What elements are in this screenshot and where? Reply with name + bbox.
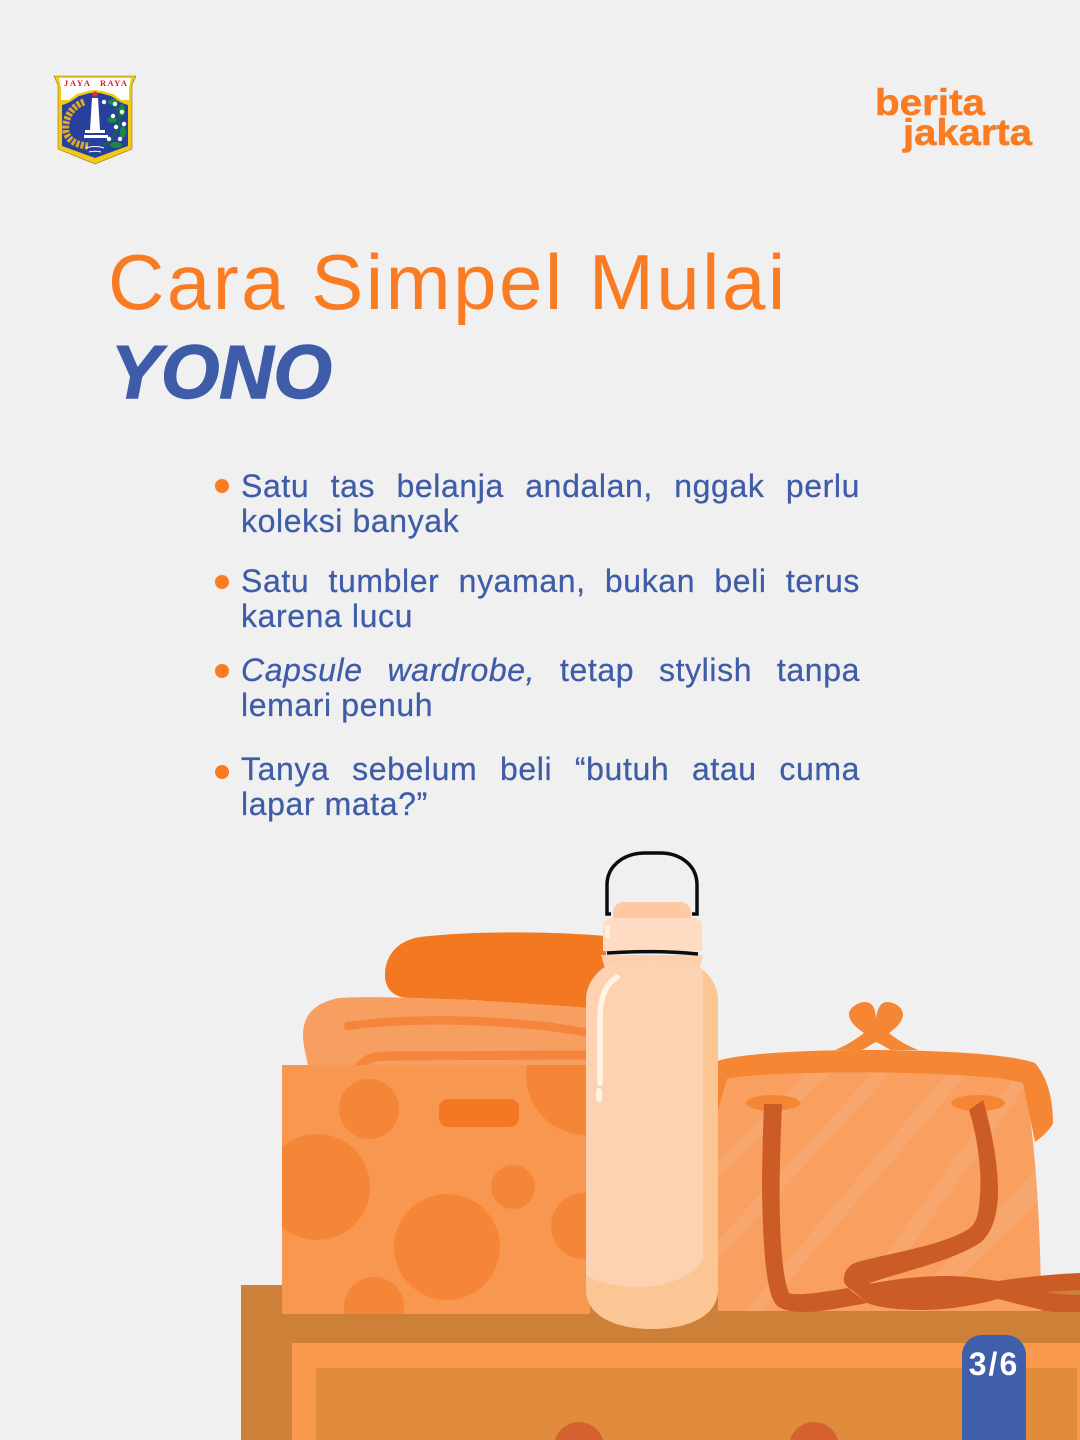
logo: Jakarta emblem: JAYA: [64, 78, 91, 88]
water bottle: [586, 853, 718, 1329]
bullet 3: Capsule wardrobe, tetap stylish tanpa: [241, 652, 860, 688]
bullet 2: Satu tumbler nyaman, bukan beli terus: [241, 563, 860, 599]
bullet 1: [215, 468, 860, 539]
illustration: table, box, towels, bottle and bag: [241, 851, 1080, 1440]
bullet 1: koleksi banyak: [241, 503, 459, 539]
bullet list: [215, 468, 860, 822]
logo: Jakarta emblem: RAYA: [100, 78, 128, 88]
bullet 2: karena lucu: [241, 598, 413, 634]
title line: YONO: YONO: [111, 330, 332, 414]
bullet 3: lemari penuh: [241, 687, 433, 723]
light orange towel: [303, 997, 590, 1068]
logo: berita jakarta: berita: [875, 82, 985, 123]
page badge 3/6: [962, 1335, 1026, 1440]
bullet 4: lapar mata?”: [241, 786, 428, 822]
title line: Cara Simpel Mulai: Cara Simpel Mulai: [108, 238, 788, 326]
bullet 2: [215, 563, 860, 634]
polka dot box: [282, 1065, 590, 1314]
bullet 4: [215, 751, 860, 822]
logo: berita jakarta: jakarta: [902, 112, 1032, 153]
logo: Jakarta emblem: [54, 76, 136, 164]
dark orange towel: [385, 932, 606, 1008]
logo: berita jakarta: [875, 82, 1033, 153]
bullet 3: [215, 652, 860, 723]
table: [241, 1285, 1080, 1440]
bullet 1: Satu tas belanja andalan, nggak perlu: [241, 468, 860, 504]
tote bag: [718, 1002, 1080, 1312]
page badge 3/6: 3/6: [969, 1346, 1019, 1382]
bullet 4: Tanya sebelum beli “butuh atau cuma: [241, 751, 860, 787]
